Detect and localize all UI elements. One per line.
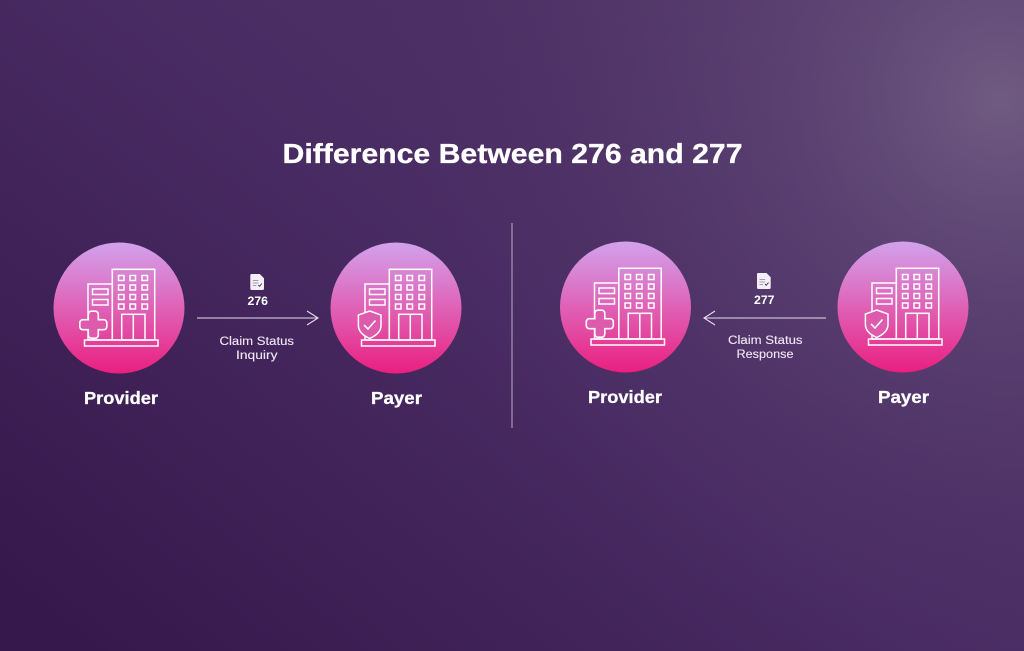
label: claim status inquiry xyxy=(220,336,294,362)
panel: 276 inquiry xyxy=(54,242,462,408)
code: 276: 276 xyxy=(248,296,268,308)
label: claim status response: Response xyxy=(736,349,794,361)
label: claim status inquiry: Claim Status xyxy=(220,336,294,348)
panel: 277 response xyxy=(560,242,968,407)
exchange: 277 response xyxy=(704,273,826,361)
icon: provider hospital building xyxy=(54,242,184,374)
divider xyxy=(511,223,513,428)
label: payer: Payer xyxy=(878,387,929,407)
label: claim status response xyxy=(728,335,803,361)
arrow: provider to payer xyxy=(197,311,318,325)
label: claim status inquiry: Inquiry xyxy=(236,350,278,362)
arrow: payer to provider xyxy=(704,311,826,325)
payer node, right xyxy=(838,242,968,407)
exchange: 276 request xyxy=(197,274,318,362)
label: claim status response: Claim Status xyxy=(728,335,803,347)
label: payer: Payer xyxy=(371,388,422,408)
payer node, left xyxy=(330,242,462,408)
provider node, left xyxy=(54,242,184,408)
icon: payer building with shield xyxy=(330,242,462,374)
icon: document xyxy=(757,273,771,289)
icon: document xyxy=(250,274,264,290)
code: 277: 277 xyxy=(754,295,774,307)
title: Difference Between 276 and 277 xyxy=(282,138,742,169)
label: provider: Provider xyxy=(84,388,158,408)
icon: payer building with shield xyxy=(838,242,968,372)
label: provider: Provider xyxy=(588,387,662,407)
icon: provider hospital building xyxy=(560,242,691,372)
provider node, right xyxy=(560,242,691,407)
